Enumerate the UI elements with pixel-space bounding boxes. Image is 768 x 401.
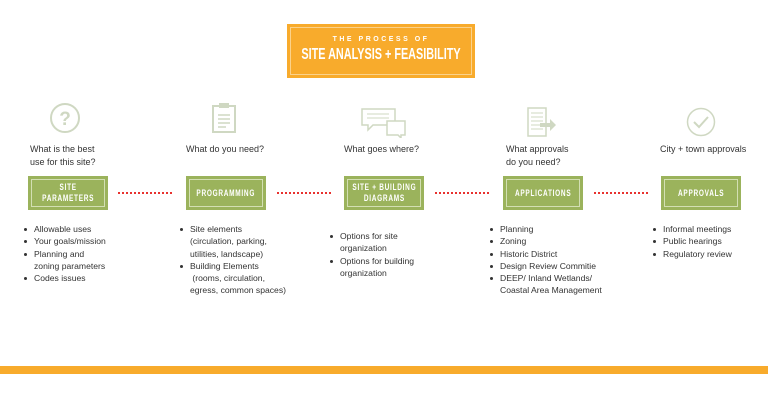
list 5: Informal meetings <box>663 224 731 234</box>
list 1: zoning parameters <box>34 261 105 271</box>
icon: clipboard <box>212 103 236 133</box>
bottom bar <box>0 366 768 374</box>
list 2 <box>180 224 286 295</box>
list 4 <box>490 224 602 295</box>
question 3: What goes where? <box>344 144 419 154</box>
question 1 <box>30 144 96 166</box>
question 1: use for this site? <box>30 156 96 166</box>
icon: question: ? <box>59 109 71 130</box>
icon: question <box>50 103 80 133</box>
question 2: What do you need? <box>186 144 264 154</box>
box: approvals: APPROVALS <box>678 188 724 198</box>
list 2: Site elements <box>190 224 242 234</box>
list 5 <box>653 224 732 259</box>
icon: document arrow <box>527 107 556 137</box>
list 1: Your goals/mission <box>34 236 106 246</box>
list 1: Allowable uses <box>34 224 91 234</box>
arrow: dots 1 <box>118 192 172 194</box>
question 1: What is the best <box>30 144 95 154</box>
icon: check <box>686 108 716 136</box>
list 4: Zoning <box>500 236 526 246</box>
arrow: dots 2 <box>277 192 331 194</box>
list 4: Historic District <box>500 249 557 259</box>
question 4 <box>506 144 569 167</box>
box: site parameters <box>28 176 108 210</box>
list 1: Planning and <box>34 249 84 259</box>
box: programming <box>186 176 266 210</box>
list 2: Building Elements <box>190 261 259 271</box>
box: programming: PROGRAMMING <box>197 188 255 198</box>
list 4: Design Review Commitie <box>500 261 596 271</box>
question 4: do you need? <box>506 156 561 166</box>
list 4: DEEP/ Inland Wetlands/ <box>500 273 592 283</box>
list 1 <box>24 224 106 283</box>
box: diagrams: DIAGRAMS <box>363 193 405 203</box>
title <box>287 24 475 78</box>
list 4: Planning <box>500 224 533 234</box>
box: diagrams <box>344 176 424 210</box>
icon: speech bubbles <box>361 108 406 138</box>
list 1: Codes issues <box>34 273 86 283</box>
box: approvals <box>661 176 741 210</box>
box: applications <box>503 176 583 210</box>
list 5: Regulatory review <box>663 249 732 259</box>
list 3: organization <box>340 243 387 253</box>
box: applications: APPLICATIONS <box>515 188 571 198</box>
list 3: organization <box>340 268 387 278</box>
list 2: egress, common spaces) <box>190 285 286 295</box>
arrow: dots 4 <box>594 192 648 194</box>
list 2: utilities, landscape) <box>190 249 263 259</box>
box: site parameters: SITE <box>59 182 77 192</box>
list 2: (rooms, circulation, <box>192 273 265 283</box>
arrow: dots 3 <box>435 192 489 194</box>
box: site parameters: PARAMETERS <box>42 193 94 203</box>
list 2: (circulation, parking, <box>190 236 267 246</box>
question 4: What approvals <box>506 144 569 154</box>
box: diagrams: SITE + BUILDING <box>352 182 416 192</box>
list 5: Public hearings <box>663 236 722 246</box>
question 5: City + town approvals <box>660 144 746 154</box>
title: SITE ANALYSIS + FEASIBILITY <box>301 46 461 63</box>
title: THE PROCESS OF <box>333 36 429 43</box>
list 3: Options for building <box>340 256 414 266</box>
list 3 <box>330 231 414 278</box>
list 4: Coastal Area Management <box>500 285 602 295</box>
list 3: Options for site <box>340 231 398 241</box>
